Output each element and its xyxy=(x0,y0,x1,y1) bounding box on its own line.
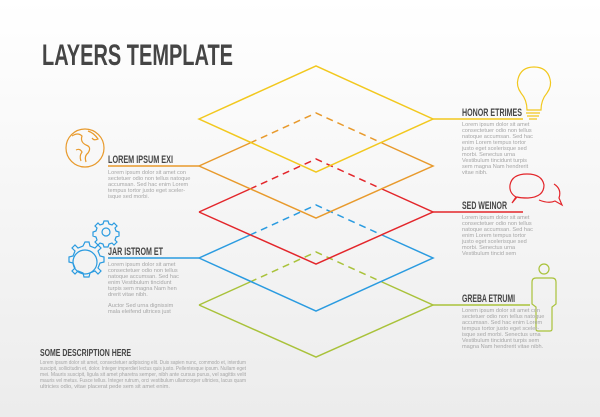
layer: green xyxy=(199,252,530,357)
heading: greba etrumi xyxy=(462,293,544,350)
heading: jar istrom et: Auctor Sed urna dignissim xyxy=(108,303,174,309)
description block xyxy=(40,348,246,390)
heading: sed weinor: enim Lorem tempus tortor xyxy=(462,233,526,239)
heading: greba etrumi: isque sed morbi. Senectus urna xyxy=(462,332,542,338)
heading: honor etrimes: consectetuer odio non tellus xyxy=(462,128,532,134)
heading: honor etrimes: morbi. Senectus urna xyxy=(462,152,516,158)
heading: honor etrimes xyxy=(461,107,533,176)
heading: honor etrimes: Lorem ipsum dolor sit amet xyxy=(462,122,530,128)
heading: honor etrimes: sem magna Nam hendrerit xyxy=(462,164,529,170)
heading: sed weinor: SED WEINOR xyxy=(462,200,507,212)
heading: greba etrumi: GREBA ETRUMI xyxy=(462,293,515,305)
heading: lorem ipsum exi xyxy=(108,154,190,200)
heading: sed weinor xyxy=(461,200,533,257)
heading: honor etrimes: Vestibulum tincidunt turpis xyxy=(462,158,527,164)
description block: mei. Mauris suscipit, ligula sit amet pharetra semper, nibh ante cursus purus, vel sagittis velit xyxy=(40,372,246,378)
heading: jar istrom et: drerit vitae nibh. xyxy=(108,292,148,298)
heading: lorem ipsum exi: tempus tortor justo eget sceler- xyxy=(108,188,185,194)
description block: Lorem ipsum dolor sit amet, consectetuer adipiscing elit. Duis sapien nunc, commodo et, interdum xyxy=(40,360,246,366)
heading: honor etrimes: vitae nibh. xyxy=(462,170,488,176)
heading: sed weinor: morbi. Senectus urna xyxy=(462,245,516,251)
layer: blue xyxy=(108,205,433,311)
heading: lorem ipsum exi: Lorem ipsum dolor sit amet con xyxy=(108,170,186,176)
heading: greba etrumi: magna Nam hendrerit vitae nibh. xyxy=(462,344,544,350)
heading: lorem ipsum exi: LOREM IPSUM EXI xyxy=(108,154,173,166)
heading: jar istrom et: JAR ISTROM ET xyxy=(108,246,163,258)
icon: gears xyxy=(69,221,119,277)
icon: person xyxy=(532,264,556,331)
icon: light bulb xyxy=(517,67,551,119)
heading: sed weinor: consectetuer odio non tellus xyxy=(462,221,532,227)
layer: red xyxy=(199,159,523,264)
heading: jar istrom et: consectetuer odio non tellus xyxy=(108,268,178,274)
heading: sed weinor: justo eget scelerisque sed xyxy=(461,239,527,245)
heading: greba etrumi: accumsan. Sed hac enim Lorem xyxy=(462,320,543,326)
heading: greba etrumi: sectetuer odio non tellus natoque xyxy=(462,314,544,320)
heading: jar istrom et xyxy=(108,246,179,315)
heading: lorem ipsum exi: isque sed morbi. xyxy=(108,194,149,200)
layer: yellow xyxy=(199,66,523,172)
heading: jar istrom et: natoque accumsan. Sed hac xyxy=(108,274,179,280)
description block: ultricies odio, vitae placerat pede sem sit amet enim. xyxy=(40,384,170,390)
description block: SOME DESCRIPTION HERE xyxy=(40,348,131,359)
heading: greba etrumi: Lorem ipsum dolor sit amet con xyxy=(462,308,540,314)
heading: greba etrumi: tempus tortor justo eget sceler- xyxy=(462,326,539,332)
heading: lorem ipsum exi: sectetuer odio non tellus natoque xyxy=(108,176,190,182)
heading: honor etrimes: HONOR ETRIMES xyxy=(462,107,522,119)
icon: speech bubbles xyxy=(510,174,562,205)
heading: sed weinor: natoque accumsan. Sed hac xyxy=(462,227,533,233)
heading: lorem ipsum exi: accumsan. Sed hac enim Lorem xyxy=(108,182,189,188)
layer stack xyxy=(108,66,530,357)
layer: orange xyxy=(108,113,433,218)
heading: sed weinor: Lorem ipsum dolor sit amet xyxy=(462,215,530,221)
heading: jar istrom et: Lorem ipsum dolor sit amet xyxy=(108,262,176,268)
heading: honor etrimes: justo eget scelerisque sed xyxy=(461,146,527,152)
description block: suscipit, sollicitudin et, dolor. Integer imperdiet lectus quis justo. Pellentesque ipsum. Nullam eget xyxy=(40,366,246,372)
heading: honor etrimes: natoque accumsan. Sed hac xyxy=(462,134,533,140)
heading: sed weinor: Vestibulum tincid sem xyxy=(462,251,516,257)
title: LAYERS TEMPLATE xyxy=(42,39,233,72)
heading: honor etrimes: enim Lorem tempus tortor xyxy=(462,140,526,146)
description block: mauris vel metus. Fusce tellus. Integer rutrum, orci vestibulum ullamcorper ultricies, lacus quam xyxy=(40,378,246,384)
heading: jar istrom et: mala eleifend ultrices just xyxy=(108,309,171,315)
heading: jar istrom et: enim Vestibulum tincidunt xyxy=(108,280,172,286)
heading: greba etrumi: Vestibulum tincidunt turpis sem xyxy=(462,338,539,344)
heading: jar istrom et: turpis sem magna Nam hen xyxy=(108,286,177,292)
icon: globe xyxy=(66,129,104,167)
